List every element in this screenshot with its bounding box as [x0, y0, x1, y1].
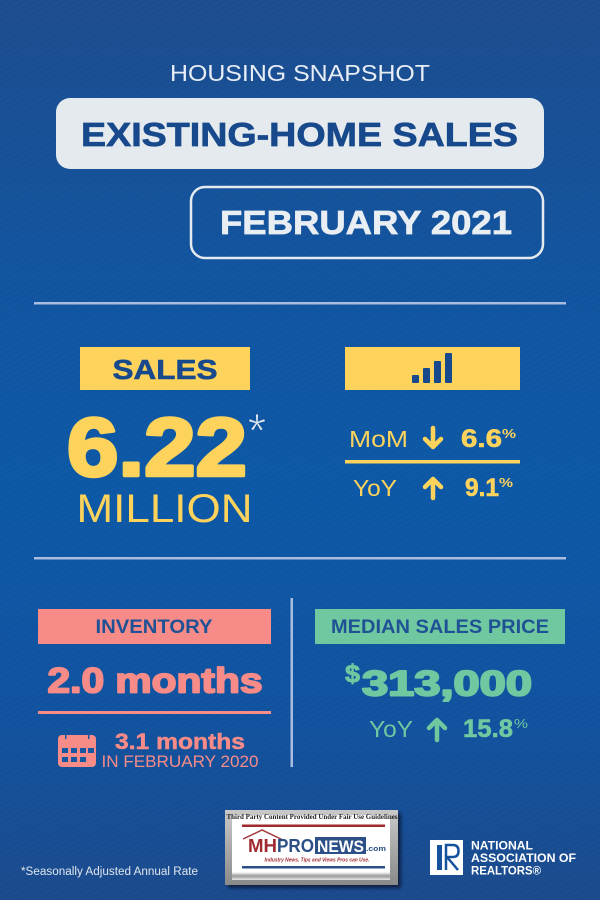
previous inventory	[102, 729, 258, 771]
badge: mhpronews: MH	[248, 836, 277, 856]
badge: mhpronews: Third Party Content Provided Under Fair Use Guidelines	[226, 812, 398, 821]
title panel: existing-home sales: EXISTING-HOME SALES	[81, 116, 518, 153]
year over year: YoY	[353, 475, 397, 501]
median sales price label	[315, 609, 565, 644]
chart icon banner	[345, 347, 520, 390]
panel: sales change	[345, 347, 520, 502]
badge: mhpronews: Industry News, Tips and Views Pros can Use.	[264, 858, 370, 864]
panel: median sales price	[315, 609, 565, 743]
badge: mhpronews	[225, 810, 401, 888]
inventory label: INVENTORY	[96, 617, 213, 638]
logo: national association of realtors: NATIONAL	[471, 838, 533, 852]
asterisk: *	[248, 405, 266, 458]
footnote: *Seasonally Adjusted Annual Rate	[21, 866, 198, 878]
million: MILLION	[76, 487, 252, 531]
title panel: existing-home sales	[56, 98, 544, 169]
month over month: 6.6	[461, 425, 502, 453]
price change: 15.8	[463, 715, 513, 743]
price figure: 313,000	[362, 664, 532, 704]
month over month: %	[502, 426, 517, 441]
icon: realtor r	[430, 840, 463, 875]
previous inventory: 3.1 months	[115, 729, 245, 754]
sales label: SALES	[112, 354, 218, 385]
price figure	[345, 660, 532, 704]
panel: sales	[67, 347, 266, 531]
panel: inventory	[38, 609, 271, 771]
badge: mhpronews: PRO	[277, 836, 314, 856]
month over month	[349, 425, 517, 453]
inventory label	[38, 609, 271, 644]
month over month: MoM	[349, 426, 408, 452]
year over year: %	[499, 475, 514, 490]
price change: YoY	[369, 716, 413, 742]
sales figure: 6.22	[67, 400, 247, 494]
date panel: february 2021	[191, 187, 543, 258]
icon: calendar	[58, 733, 96, 767]
price change: %	[514, 716, 529, 731]
logo: national association of realtors: REALTORS®	[471, 864, 541, 878]
price figure: $	[345, 660, 360, 688]
heading: housing snapshot: HOUSING SNAPSHOT	[170, 60, 430, 86]
sales label	[80, 347, 250, 390]
inventory figure: 2.0 months	[48, 662, 262, 700]
previous inventory: IN FEBRUARY 2020	[102, 752, 258, 771]
icon: roof	[243, 830, 283, 840]
year over year: 9.1	[465, 474, 499, 502]
badge: mhpronews: NEWS	[317, 837, 364, 856]
price change	[369, 715, 529, 743]
badge: mhpronews: .com	[366, 844, 386, 853]
logo: national association of realtors: ASSOCIATION OF	[471, 851, 576, 865]
year over year	[353, 474, 514, 502]
median sales price label: MEDIAN SALES PRICE	[331, 617, 549, 638]
date panel: february 2021: FEBRUARY 2021	[220, 204, 512, 241]
logo: national association of realtors	[430, 838, 576, 878]
